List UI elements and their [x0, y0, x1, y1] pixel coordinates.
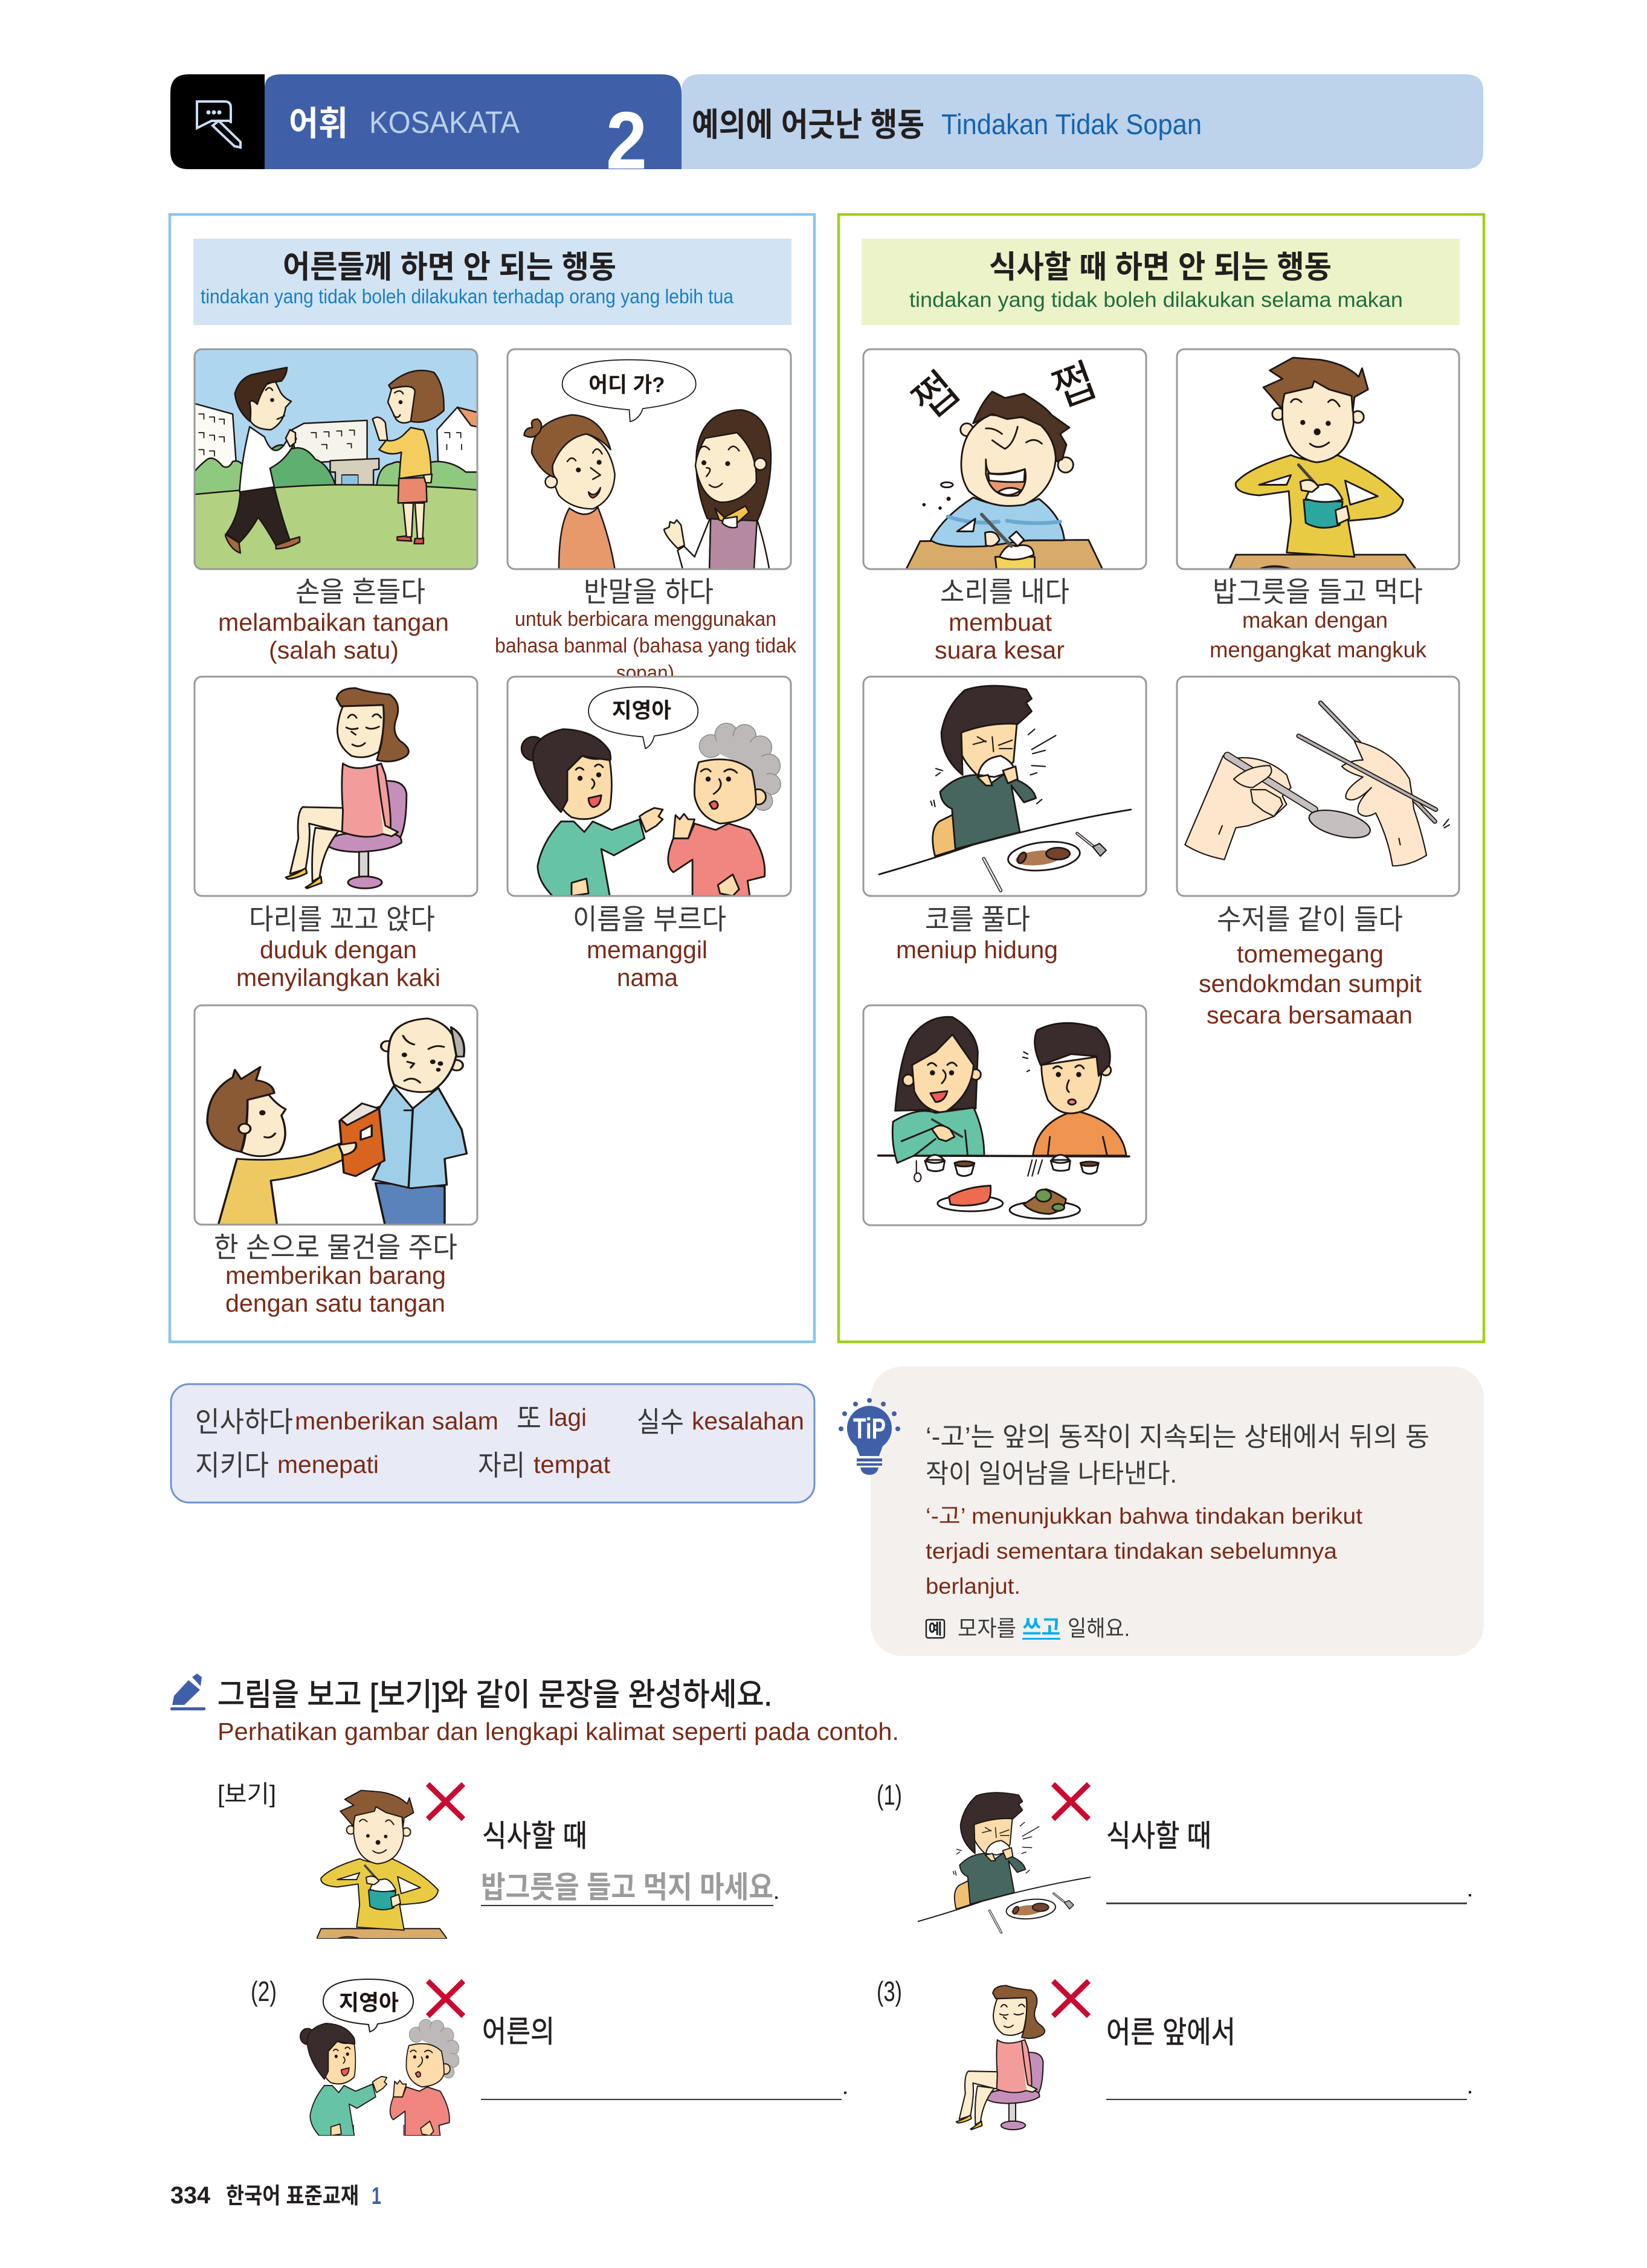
lesson title tab: Tindakan Tidak Sopan: [941, 108, 1202, 140]
tip box: ‘-고’는 앞의 동작이 지속되는 상태에서 뒤의 동: [926, 1422, 1429, 1452]
lesson title tab: 예의에 어긋난 행동: [692, 107, 924, 143]
card: holding spoon and chopsticks: tomemegang: [1237, 940, 1384, 968]
exercise 1: 식사할 때: [1106, 1819, 1211, 1853]
exercise 1: (1): [877, 1779, 902, 1811]
lesson title tab: [682, 74, 1483, 169]
illustration: lifting the bowl: [317, 1790, 447, 1939]
card: talking at the table: [863, 1005, 1146, 1225]
panel heading: tindakan yang tidak boleh dilakukan selama makan: [909, 288, 1403, 312]
vocabulary hint box: tempat: [533, 1451, 611, 1478]
card: giving with one hand: dengan satu tangan: [225, 1289, 445, 1317]
card: waving hand: 손을 흔들다: [295, 576, 425, 608]
footer: [170, 2182, 381, 2209]
icon: red cross: [428, 1981, 463, 2016]
vocabulary hint box: 자리: [478, 1449, 525, 1481]
card: waving hand: [192, 347, 481, 664]
vocabulary hint box: lagi: [549, 1403, 587, 1431]
exercise heading: Perhatikan gambar dan lengkapi kalimat seperti pada contoh.: [218, 1718, 899, 1745]
card: blowing nose: [863, 677, 1146, 964]
vocabulary hint box: 지키다: [195, 1449, 269, 1481]
icon tab: speech bubble with pencil: [170, 74, 265, 169]
card: loud eating: membuat: [949, 608, 1052, 636]
exercise 2: 어른의: [482, 2015, 555, 2049]
icon: red cross: [428, 1784, 463, 1819]
card: crossed legs: 다리를 꼬고 앉다: [249, 903, 435, 935]
example sentence: 예: [928, 1621, 943, 1638]
footer: 334: [170, 2182, 211, 2209]
card: lifting the bowl: mengangkat mangkuk: [1210, 637, 1426, 662]
card: casual speech: sopan): [616, 662, 674, 685]
card: holding spoon and chopsticks: secara bersamaan: [1207, 1001, 1413, 1029]
exercise 1: [877, 1779, 1471, 1933]
card: lifting the bowl: 밥그릇을 들고 먹다: [1213, 576, 1423, 608]
icon: red cross: [1053, 1784, 1089, 1819]
vocabulary tab: 어휘: [289, 105, 348, 143]
illustration: calling by name: [300, 1979, 459, 2136]
vocabulary tab: 2: [606, 95, 647, 186]
card: calling by name: [508, 677, 791, 991]
footer: 1: [372, 2183, 381, 2209]
panel heading: tindakan yang tidak boleh dilakukan terhadap orang yang lebih tua: [201, 285, 734, 308]
illustration: blowing nose: [918, 1792, 1091, 1934]
exercise 2: (2): [251, 1976, 277, 2007]
card: holding spoon and chopsticks: 수저를 같이 들다: [1217, 903, 1403, 935]
card: crossed legs: menyilangkan kaki: [236, 964, 440, 991]
illustration: crossed legs: [956, 1985, 1045, 2130]
example sentence: 일해요.: [1068, 1616, 1130, 1641]
exercise 3: [877, 1976, 1471, 2130]
card: calling by name: memanggil: [587, 936, 707, 964]
card: holding spoon and chopsticks: sendokmdan sumpit: [1199, 970, 1422, 997]
card: giving with one hand: 한 손으로 물건을 주다: [214, 1231, 457, 1263]
card: loud eating: 소리를 내다: [940, 576, 1069, 608]
card: casual speech: bahasa banmal (bahasa yang tidak: [495, 634, 797, 657]
card: waving hand: (salah satu): [269, 636, 399, 664]
card: giving with one hand: [195, 1005, 477, 1317]
exercise 3: (3): [877, 1976, 902, 2007]
exercise heading: 그림을 보고 [보기]와 같이 문장을 완성하세요.: [218, 1678, 772, 1713]
panel heading: 어른들께 하면 안 되는 행동: [283, 250, 616, 285]
card: lifting the bowl: [1177, 349, 1459, 662]
example sentence: 쓰고: [1022, 1615, 1060, 1640]
tip box: berlanjut.: [926, 1574, 1020, 1599]
vocabulary hint box: 인사하다: [195, 1406, 293, 1438]
card: casual speech: [495, 349, 797, 685]
panel: before elders: [170, 214, 814, 1342]
vocabulary hint box: 실수: [637, 1406, 684, 1438]
card: crossed legs: [195, 677, 477, 991]
card: casual speech: 반말을 하다: [584, 576, 714, 608]
card: calling by name: nama: [617, 964, 678, 991]
vocabulary hint box: menberikan salam: [295, 1407, 498, 1435]
vocabulary hint box: [171, 1384, 814, 1503]
card: crossed legs: duduk dengan: [260, 936, 417, 964]
card: loud eating: suara kesar: [935, 636, 1065, 664]
vocabulary tab: KOSAKATA: [369, 105, 520, 140]
vocabulary hint box: kesalahan: [692, 1407, 804, 1435]
vocabulary hint box: 또: [517, 1402, 541, 1434]
icon: pencil: [170, 1674, 205, 1710]
example sentence: [926, 1615, 1130, 1641]
panel heading: 식사할 때 하면 안 되는 행동: [989, 250, 1332, 285]
card: waving hand: melambaikan tangan: [218, 608, 449, 636]
vocabulary tab: [265, 74, 682, 186]
example sentence: 모자를: [958, 1616, 1016, 1641]
card: blowing nose: meniup hidung: [896, 936, 1058, 964]
card: loud eating: [863, 349, 1146, 664]
tip box: ‘-고’ menunjukkan bahwa tindakan berikut: [926, 1504, 1363, 1529]
illustration: calling by name: 지영아: [339, 1990, 399, 2015]
icon: tip light bulb: TiP: [853, 1413, 886, 1445]
icon: tip light bulb: [839, 1398, 900, 1475]
panel heading: [193, 239, 791, 325]
example item: 밥그릇을 들고 먹지 마세요: [481, 1870, 773, 1904]
tip box: [839, 1367, 1484, 1656]
vocabulary hint box: menepati: [277, 1451, 379, 1478]
example item: [보기]: [218, 1781, 276, 1808]
card: casual speech: untuk berbicara menggunakan: [515, 608, 776, 631]
exercise heading: [170, 1674, 899, 1745]
card: giving with one hand: memberikan barang: [225, 1261, 446, 1289]
panel: while eating: [839, 214, 1484, 1342]
example item: 식사할 때: [482, 1819, 587, 1853]
card: calling by name: 이름을 부르다: [573, 903, 726, 935]
exercise 2: [251, 1976, 846, 2136]
card: holding spoon and chopsticks: [1177, 677, 1459, 1029]
header bar: [170, 74, 1483, 186]
tip box: 작이 일어남을 나타낸다.: [926, 1459, 1177, 1489]
panel heading: [862, 239, 1460, 325]
tip box: terjadi sementara tindakan sebelumnya: [926, 1539, 1337, 1564]
exercise 3: 어른 앞에서: [1106, 2015, 1236, 2049]
icon: red cross: [1053, 1981, 1089, 2016]
footer: 한국어 표준교재: [226, 2183, 359, 2208]
card: blowing nose: 코를 풀다: [925, 903, 1030, 935]
card: lifting the bowl: makan dengan: [1242, 608, 1388, 633]
example item: [218, 1781, 778, 1939]
